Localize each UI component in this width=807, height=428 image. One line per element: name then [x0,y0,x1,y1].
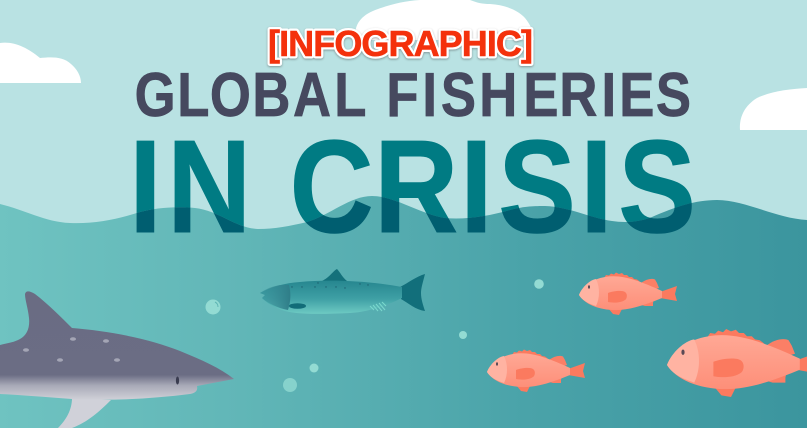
bubbles [206,279,544,392]
cloud: left [0,43,81,83]
heading: in crisis above water: IN CRISIS [129,113,696,261]
salmon speckles [291,282,369,289]
red fish: upper [579,272,677,315]
shark pectoral fin [58,398,111,428]
heading: global fisheries: GLOBAL FISHERIES [135,61,691,130]
cloud: right [740,88,807,130]
salmon dorsal fin [322,269,347,281]
tag: infographic label: [INFOGRAPHIC] [268,23,533,64]
salmon head [260,285,290,310]
salmon body [260,281,402,314]
shark eye [176,376,179,384]
tag: infographic label: [INFOGRAPHIC] [268,23,533,64]
shark body [0,291,234,400]
shark [0,291,234,428]
salmon pectoral fin [289,303,306,309]
red fish: lower [487,350,585,392]
ocean water [0,196,807,428]
cloud: top centre [355,0,534,40]
red fish: large [667,329,807,397]
shark spots [23,337,120,362]
heading: in crisis submerged part: IN CRISIS [129,113,696,261]
salmon tail [400,274,425,311]
salmon [260,269,425,314]
salmon ventral fin [370,302,386,311]
